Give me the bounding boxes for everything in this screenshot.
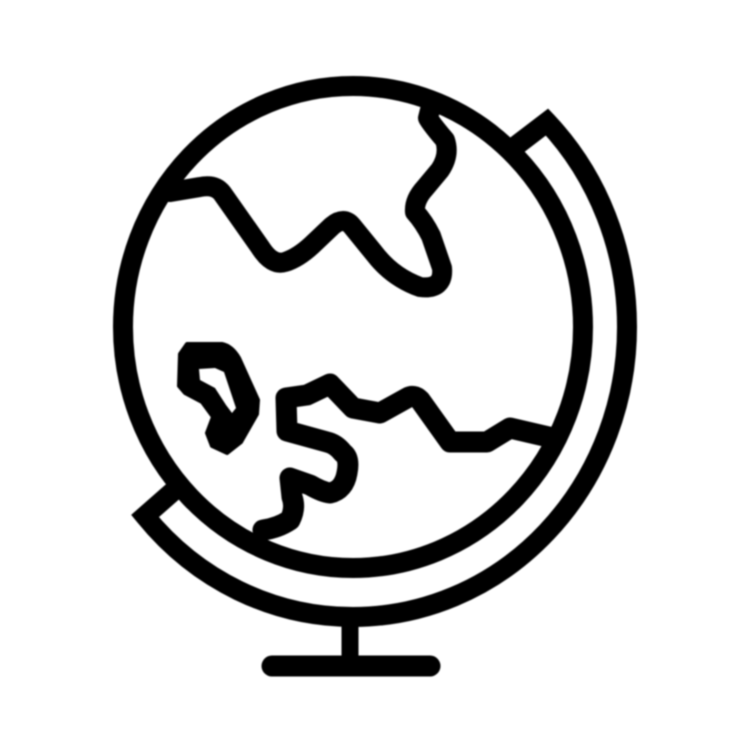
upper continent	[170, 102, 447, 287]
island inner lake	[199, 368, 236, 413]
lower continent	[263, 384, 553, 530]
meridian arc	[145, 122, 627, 617]
stand post	[342, 620, 358, 665]
globe sphere	[123, 86, 583, 568]
island	[179, 344, 258, 453]
stand base	[272, 656, 430, 676]
